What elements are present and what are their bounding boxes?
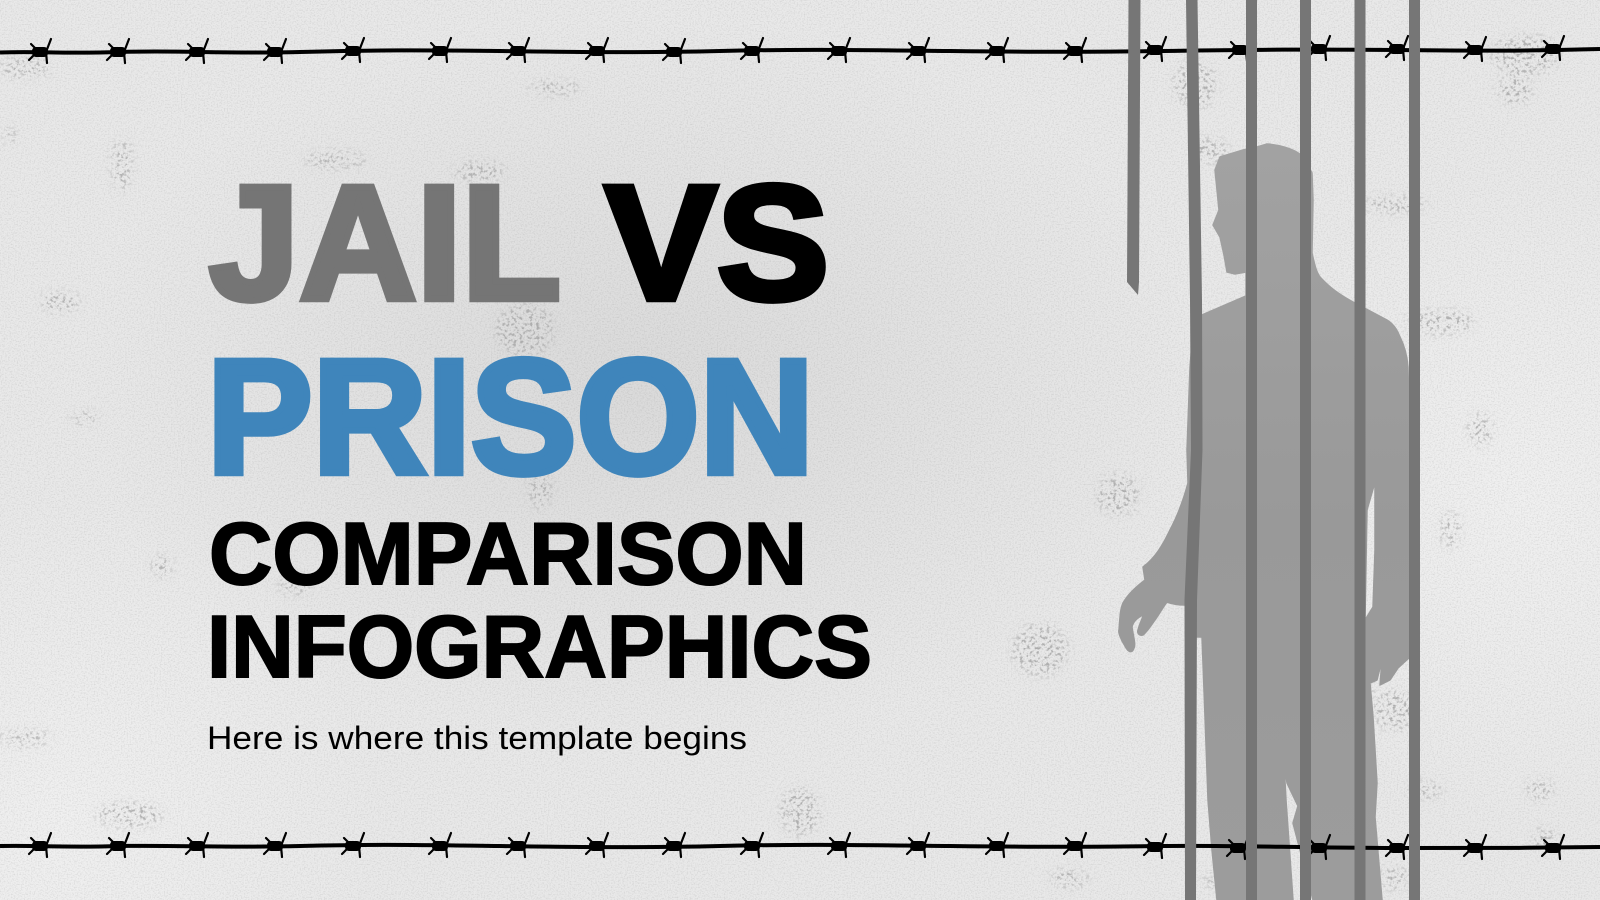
barbed wire: top — [0, 36, 1600, 63]
subtitle: Here is where this template begins — [207, 720, 747, 756]
title line: INFOGRAPHICS: INFOGRAPHICS — [207, 597, 872, 696]
title word: PRISON: PRISON — [207, 325, 814, 508]
prison bars — [1127, 0, 1420, 900]
title line: COMPARISON: COMPARISON — [209, 504, 807, 603]
silhouette of a man behind bars — [1119, 144, 1410, 900]
barbed wire: bottom — [0, 833, 1600, 859]
title — [207, 151, 872, 696]
title word: VS: VS — [605, 151, 829, 334]
title word: JAIL: JAIL — [209, 151, 561, 334]
